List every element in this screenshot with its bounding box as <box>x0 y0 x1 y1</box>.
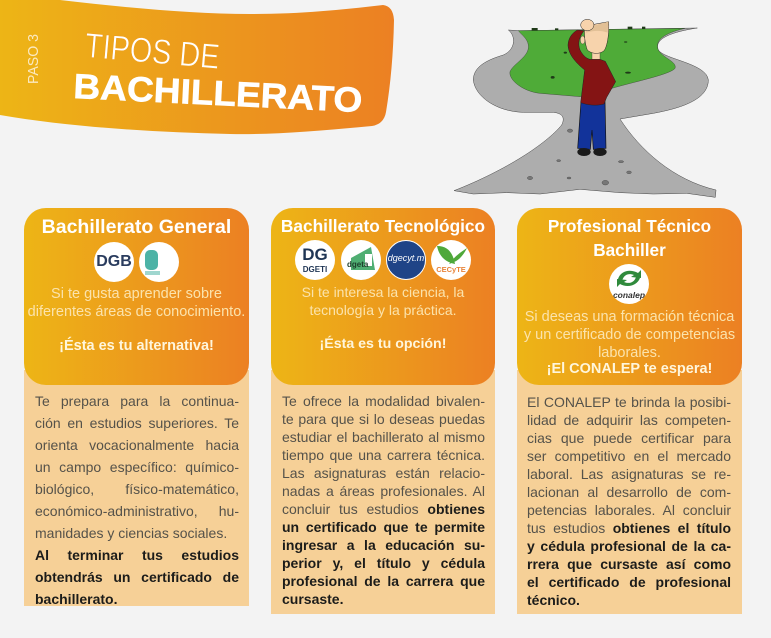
tecnologico body text: concluir tus estudios obtienes <box>282 501 485 517</box>
tecnologico body text: profesional de la carrera que <box>282 573 485 589</box>
profesional title: Profesional Técnico <box>548 216 711 236</box>
tecnologico intro <box>302 284 464 318</box>
profesional body text: y cédula profesional de la ca- <box>527 538 731 554</box>
profesional intro: y un certificado de competencias <box>524 327 735 343</box>
general description background <box>24 370 249 606</box>
general header card <box>24 208 249 385</box>
general body text: Te prepara para la continua- <box>35 393 239 409</box>
profesional intro: Si deseas una formación técnica <box>525 309 734 325</box>
road <box>454 28 716 197</box>
paso label: PASO 3 <box>25 34 42 84</box>
general intro <box>28 286 245 320</box>
general body text: Al terminar tus estudios <box>35 547 239 563</box>
profesional title: Bachiller <box>593 240 666 260</box>
tecnologico body text: Te ofrece la modalidad bivalen- <box>282 393 485 409</box>
general body text: obtendrás un certificado de <box>35 569 239 585</box>
general body text: orienta vocacionalmente hacia <box>35 437 239 453</box>
tecnologico body text: perior y, el título y cédula <box>282 555 485 571</box>
profesional call to action: ¡El CONALEP te espera! <box>547 361 712 377</box>
neck <box>592 50 600 61</box>
tecnologico body text <box>282 393 486 607</box>
ear <box>580 36 585 44</box>
profesional body text <box>527 394 732 608</box>
profesional body text: técnico. <box>527 592 580 608</box>
general body text: ción en estudios superiores. Te <box>35 415 239 431</box>
logo: DGETA: dgeta <box>347 260 369 269</box>
general body text: manidades y ciencias sociales. <box>35 525 227 541</box>
logo: CECyTE: CECyTE <box>436 265 466 274</box>
general body text: un campo específico: químico- <box>35 459 239 475</box>
title line one: TIPOS DE <box>83 26 221 77</box>
profesional body text: El CONALEP te brinda la posibi- <box>527 394 731 410</box>
profesional body text: laboral. Las asignaturas se re- <box>527 466 731 482</box>
tecnologico title: Bachillerato Tecnológico <box>281 216 485 236</box>
logo: bachillerato <box>139 242 179 282</box>
general body text: biológico, físico-matemático, <box>35 481 239 497</box>
profesional body text: lidad de adquirir las competen- <box>527 412 731 428</box>
logo: DGECyTM <box>386 240 426 280</box>
tecnologico intro: tecnología y la práctica. <box>309 302 457 318</box>
general body text: bachillerato. <box>35 591 117 607</box>
logo: DGETI: DGETI <box>303 265 327 274</box>
tecnologico body text: Las asignaturas están relacio- <box>282 465 485 481</box>
profesional intro <box>524 309 735 361</box>
general body text: económico-administrativo, hu- <box>35 503 239 519</box>
logo: DGETA <box>341 240 381 280</box>
tecnologico body text: te para que si lo deseas puedas <box>282 411 485 427</box>
hand <box>581 19 594 31</box>
grass tufts <box>532 27 645 79</box>
profesional header card <box>517 208 742 385</box>
profesional body text: rrera que cursaste así como <box>527 556 731 572</box>
logo: CONALEP: conalep <box>613 290 645 300</box>
torso and raised arm <box>568 30 616 105</box>
tecnologico body text: nadas a áreas profesionales. Al <box>282 483 485 499</box>
tecnologico call to action: ¡Ésta es tu opción! <box>320 336 446 352</box>
logo: DGETI: DG <box>302 245 328 264</box>
legs <box>578 102 606 149</box>
profesional body text: petencias laborales. Al concluir <box>527 502 731 518</box>
profesional description background <box>517 370 742 614</box>
tecnologico intro: Si te interesa la ciencia, la <box>302 284 464 300</box>
logo: DGB <box>94 242 134 282</box>
hair <box>585 22 608 33</box>
general intro: Si te gusta aprender sobre <box>51 286 222 302</box>
logo: CONALEP <box>609 264 649 304</box>
logo: DGETI <box>295 240 335 280</box>
tecnologico header card <box>271 208 495 385</box>
profesional body text: tus estudios obtienes el título <box>527 520 731 536</box>
profesional body text: lacionan al desarrollo de com- <box>527 484 731 500</box>
tecnologico description background <box>271 370 495 614</box>
general intro: diferentes áreas de conocimiento. <box>28 304 245 320</box>
title line two: BACHILLERATO <box>73 67 363 120</box>
general body text <box>35 393 240 607</box>
illustration: person at a fork in the road <box>454 19 716 198</box>
profesional title <box>548 216 711 260</box>
tecnologico body text: cursaste. <box>282 591 343 607</box>
profesional body text: ser competitivo en el mercado <box>527 448 731 464</box>
tecnologico body text: tiempo que una carrera técnica. <box>282 447 485 463</box>
logo: CECyTE <box>431 240 471 280</box>
head <box>584 22 609 53</box>
general title: Bachillerato General <box>42 216 231 238</box>
profesional body text: cias que puede certificar para <box>527 430 731 446</box>
header banner <box>0 0 394 134</box>
shoes <box>577 148 607 156</box>
logo: DGECyTM: dgecyt.m <box>388 253 424 263</box>
profesional intro: laborales. <box>598 345 661 361</box>
tecnologico body text: estudiar el bachillerato al mismo <box>282 429 485 445</box>
logo: DGB: DGB <box>96 253 132 270</box>
tecnologico body text: ingresar a la educación su- <box>282 537 485 553</box>
profesional body text: el certificado de profesional <box>527 574 731 590</box>
grass <box>510 28 685 97</box>
general call to action: ¡Ésta es tu alternativa! <box>59 338 214 354</box>
tecnologico body text: un certificado que te permite <box>282 519 485 535</box>
stones <box>527 129 631 185</box>
